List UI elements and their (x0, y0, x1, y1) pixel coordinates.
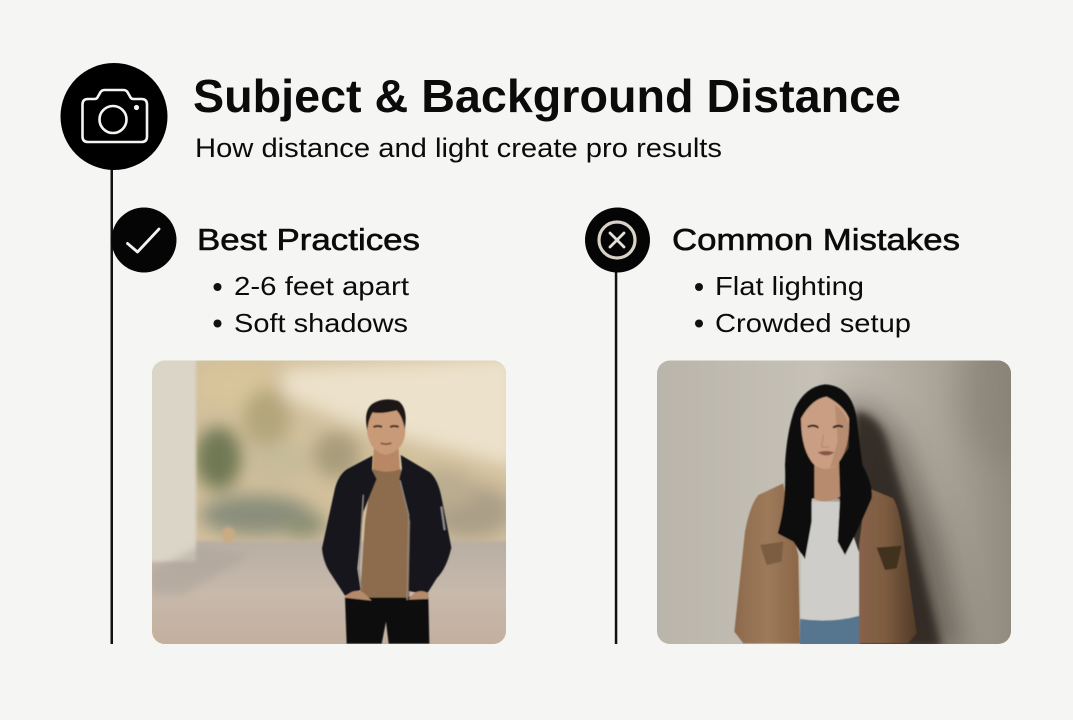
jacket right (399, 455, 451, 594)
t-shirt (360, 469, 411, 598)
list: best practices: 2-6 feet apart (234, 271, 410, 301)
list: common mistakes (695, 271, 911, 338)
neck (373, 445, 400, 472)
subtitle: How distance and light create pro results (195, 133, 722, 163)
vertical timeline line: left (110, 165, 113, 644)
vertical timeline line: right (615, 268, 617, 644)
hair (778, 384, 872, 559)
jacket left (734, 483, 800, 643)
jeans (345, 597, 429, 644)
heading: best practices: Best Practices (197, 222, 420, 257)
list: common mistakes: Flat lighting (715, 271, 864, 301)
jeans (800, 616, 860, 645)
photo: man with blurred background (152, 360, 506, 644)
cast shadow (842, 402, 965, 655)
hair (366, 399, 406, 430)
heading: common mistakes: Common Mistakes (672, 222, 960, 257)
infographic canvas (60, 63, 1011, 644)
face (366, 410, 406, 455)
neck (814, 462, 840, 502)
face (801, 397, 849, 469)
icon: x badge (585, 208, 650, 272)
list: best practices: Soft shadows (234, 308, 408, 338)
jacket left (322, 456, 377, 596)
t-shirt (801, 502, 860, 621)
list: common mistakes: Crowded setup (715, 308, 911, 338)
icon: check badge (112, 208, 176, 272)
jacket right (859, 487, 917, 643)
list: best practices (214, 271, 410, 338)
hands (344, 591, 372, 601)
title: Subject & Background Distance (193, 70, 901, 122)
photo: woman against wall (657, 360, 1011, 644)
icon: camera badge (60, 63, 168, 170)
